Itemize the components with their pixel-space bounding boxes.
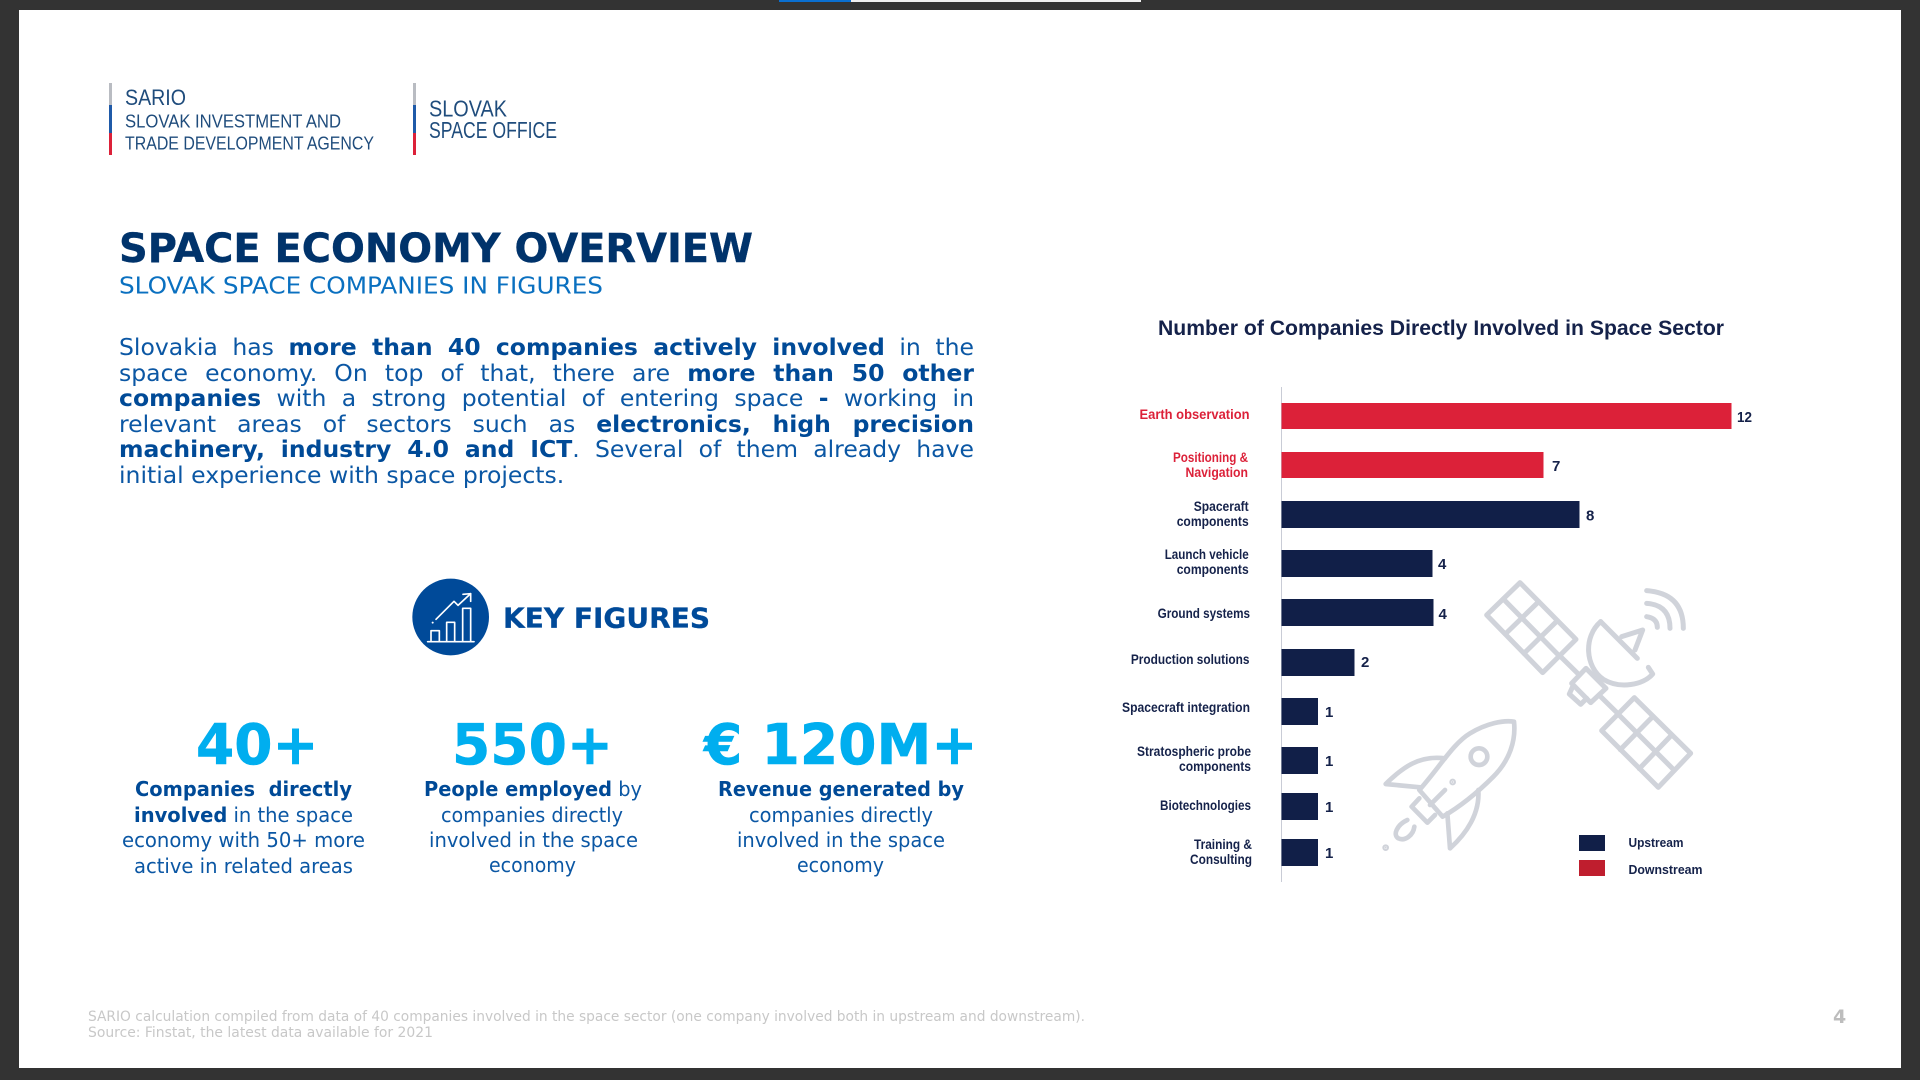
key figure: 120M+ revenue: € 120M+ [702, 713, 978, 778]
bar: Launch vehicle components [1165, 547, 1447, 577]
legend: Upstream [1628, 835, 1684, 850]
logo: SARIO: SARIO [125, 85, 186, 110]
bar: Training and Consulting: Consulting [1190, 852, 1252, 867]
logo: SARIO: TRADE DEVELOPMENT AGENCY [125, 132, 374, 154]
bar: Spacecraft components: Spaceraft [1194, 499, 1249, 514]
bar: Launch vehicle components: components [1177, 562, 1249, 577]
footnote: Source: Finstat, the latest data available for 2021 [88, 1025, 433, 1041]
bar: Training and Consulting: 1 [1325, 845, 1333, 862]
bar: Spacecraft integration: 1 [1325, 704, 1333, 721]
intro paragraph: machinery, industry 4.0 and ICT. Several of them already have [119, 437, 974, 463]
key figure: 40+ companies: active in related areas [134, 854, 353, 878]
bar: Launch vehicle components: Launch vehicle [1165, 547, 1249, 562]
intro paragraph: Slovakia has more than 40 companies actively involved in the [119, 335, 974, 361]
bar: Ground systems: 4 [1438, 606, 1448, 623]
key figure: 40+ companies: involved in the space [134, 803, 353, 827]
key figure: 120M+ revenue: companies directly [749, 803, 933, 827]
bar: Stratospheric probe components [1137, 744, 1333, 774]
key figure: 40+ companies: economy with 50+ more [122, 828, 365, 852]
key figure: 120M+ revenue: economy [797, 853, 884, 877]
bar: Launch vehicle components: 4 [1438, 556, 1447, 573]
bar: Ground systems: Ground systems [1158, 606, 1250, 621]
bar: Biotechnologies: Biotechnologies [1160, 798, 1251, 813]
key figure: 550+ people: involved in the space [429, 828, 638, 852]
icon: satellite [1487, 583, 1691, 787]
bar: Biotechnologies [1160, 793, 1333, 820]
footnote: SARIO calculation compiled from data of 40 companies involved in the space sector (one company involved both in upstream and downstream). [88, 1009, 1085, 1025]
bar: Spacecraft integration [1122, 698, 1333, 725]
key figure: 550+ people: 550+ [452, 713, 613, 778]
key figure: 550+ people [424, 713, 642, 877]
bar: Earth observation [1140, 403, 1752, 429]
footnote [88, 1009, 1085, 1041]
bar chart: companies by segment [1122, 387, 1752, 882]
key figure: 550+ people: People employed by [424, 777, 642, 801]
intro paragraph: relevant areas of sectors such as electronics, high precision [119, 412, 974, 438]
bar: Training and Consulting: Training & [1194, 837, 1252, 852]
key figure: 40+ companies: 40+ [196, 713, 318, 778]
key figure: 40+ companies: Companies directly [135, 777, 352, 801]
bar: Training and Consulting [1190, 837, 1333, 867]
bar: Positioning and Navigation: Navigation [1186, 465, 1248, 480]
title: SPACE ECONOMY OVERVIEW [119, 226, 753, 272]
bar: Spacecraft components: 8 [1586, 508, 1594, 524]
legend: Downstream [1628, 862, 1702, 877]
bar: Stratospheric probe components: components [1179, 759, 1251, 774]
logo: Slovak Space Office: SPACE OFFICE [429, 117, 557, 143]
logo: SARIO [109, 83, 374, 155]
key figure: 550+ people: companies directly [441, 803, 623, 827]
bar: Ground systems [1158, 599, 1448, 626]
bar: Spacecraft components [1177, 499, 1594, 529]
bar: Earth observation: 12 [1737, 409, 1752, 426]
page number: 4 [1833, 1006, 1846, 1028]
bar: Earth observation: Earth observation [1140, 407, 1250, 422]
key figure: 550+ people: economy [489, 853, 576, 877]
legend [1579, 835, 1702, 877]
bar: Positioning and Navigation [1173, 450, 1560, 480]
icon: rocket [1385, 721, 1514, 849]
bar: Stratospheric probe components: 1 [1325, 753, 1333, 770]
key figure: 120M+ revenue: involved in the space [737, 828, 945, 852]
key figure: 120M+ revenue [702, 713, 978, 877]
heading: key figures: KEY FIGURES [503, 602, 710, 635]
intro paragraph [119, 335, 974, 489]
icon: key figures growth chart [412, 579, 489, 655]
intro paragraph: space economy. On top of that, there are more than 50 other [119, 361, 974, 387]
bar: Biotechnologies: 1 [1325, 799, 1333, 816]
chart title: Number of Companies Directly Involved in Space Sector [1158, 316, 1725, 340]
bar: Spacecraft integration: Spacecraft integration [1122, 700, 1250, 715]
bar: Production solutions: 2 [1361, 654, 1369, 671]
intro paragraph: initial experience with space projects. [119, 463, 564, 489]
key figure: 40+ companies [122, 713, 365, 878]
subtitle: SLOVAK SPACE COMPANIES IN FIGURES [119, 272, 603, 300]
bar: Spacecraft components: components [1177, 514, 1249, 529]
logo: SARIO: SLOVAK INVESTMENT AND [125, 110, 341, 132]
bar: Production solutions: Production solutions [1131, 652, 1250, 667]
key figure: 120M+ revenue: Revenue generated by [718, 777, 964, 801]
logo: Slovak Space Office [413, 83, 557, 155]
logo: Slovak Space Office: SLOVAK [429, 96, 508, 122]
intro paragraph: companies with a strong potential of entering space - working in [119, 386, 974, 412]
bar: Positioning and Navigation: 7 [1552, 458, 1560, 475]
bar: Stratospheric probe components: Stratospheric probe [1137, 744, 1251, 759]
bar: Positioning and Navigation: Positioning & [1173, 450, 1248, 465]
top progress bar [779, 0, 1141, 2]
bar: Production solutions [1131, 649, 1369, 676]
